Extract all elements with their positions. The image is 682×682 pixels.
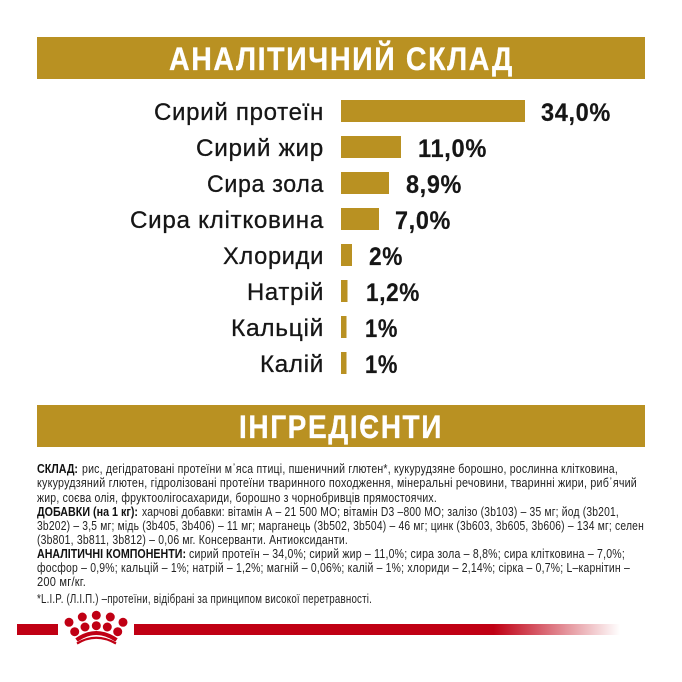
heading band: analytical composition: АНАЛІТИЧНИЙ СКЛАД — [169, 41, 514, 77]
bar chart: analytical composition — [130, 99, 611, 379]
row: sodium — [247, 279, 420, 307]
text block: analytical components: АНАЛІТИЧНІ КОМПОНЕНТИ: — [37, 547, 186, 561]
icon: royal crown — [64, 611, 128, 644]
text block: composition: СКЛАД: — [37, 462, 78, 476]
row: crude fibre: 7,0% — [395, 207, 451, 235]
text block: additives — [37, 505, 644, 547]
row: chlorides — [223, 243, 403, 271]
row: potassium: 1% — [365, 351, 398, 379]
row: crude protein — [154, 99, 611, 127]
row: crude protein: 34,0% — [541, 99, 611, 127]
row: crude ash: 8,9% — [406, 171, 462, 199]
row: chlorides: 2% — [369, 243, 403, 271]
text block: analytical components — [37, 547, 630, 589]
text block: composition — [37, 462, 637, 505]
heading band: ingredients — [37, 405, 645, 447]
text block: additives: (3b801, 3b811, 3b812) – 0,06 мг. Консерванти. Антиоксиданти. — [37, 533, 348, 547]
text block: additives: ДОБАВКИ (на 1 кг): — [37, 505, 138, 519]
row: sodium: Натрій — [247, 279, 324, 306]
row: calcium — [231, 315, 398, 343]
brand strip with crown logo — [17, 611, 620, 644]
row: crude ash — [207, 171, 462, 199]
text block: composition: жир, соєва олія, фруктоолігосахариди, борошно з чорнобривців прямостоячих. — [37, 491, 437, 505]
row: calcium: 1% — [365, 315, 398, 343]
heading band: analytical composition — [37, 37, 645, 79]
row: calcium: Кальцій — [231, 315, 324, 342]
heading band: ingredients: ІНГРЕДІЄНТИ — [239, 409, 443, 445]
row: crude protein: Сирий протеїн — [154, 99, 324, 126]
row: chlorides: Хлориди — [223, 243, 324, 270]
row: crude fibre: Сира клітковина — [130, 207, 324, 234]
row: sodium: 1,2% — [366, 279, 420, 307]
footnote: *L.I.P. (Л.І.П.) –протеїни, відібрані за принципом високої перетравності. — [37, 592, 372, 606]
row: crude ash: Сира зола — [207, 171, 324, 198]
row: potassium — [260, 351, 398, 379]
row: crude fibre — [130, 207, 451, 235]
row: crude fat: 11,0% — [418, 135, 487, 163]
row: crude fat: Сирий жир — [196, 135, 324, 162]
row: potassium: Калій — [260, 351, 324, 378]
text block: analytical components: 200 мг/кг. — [37, 575, 86, 589]
row: crude fat — [196, 135, 487, 163]
